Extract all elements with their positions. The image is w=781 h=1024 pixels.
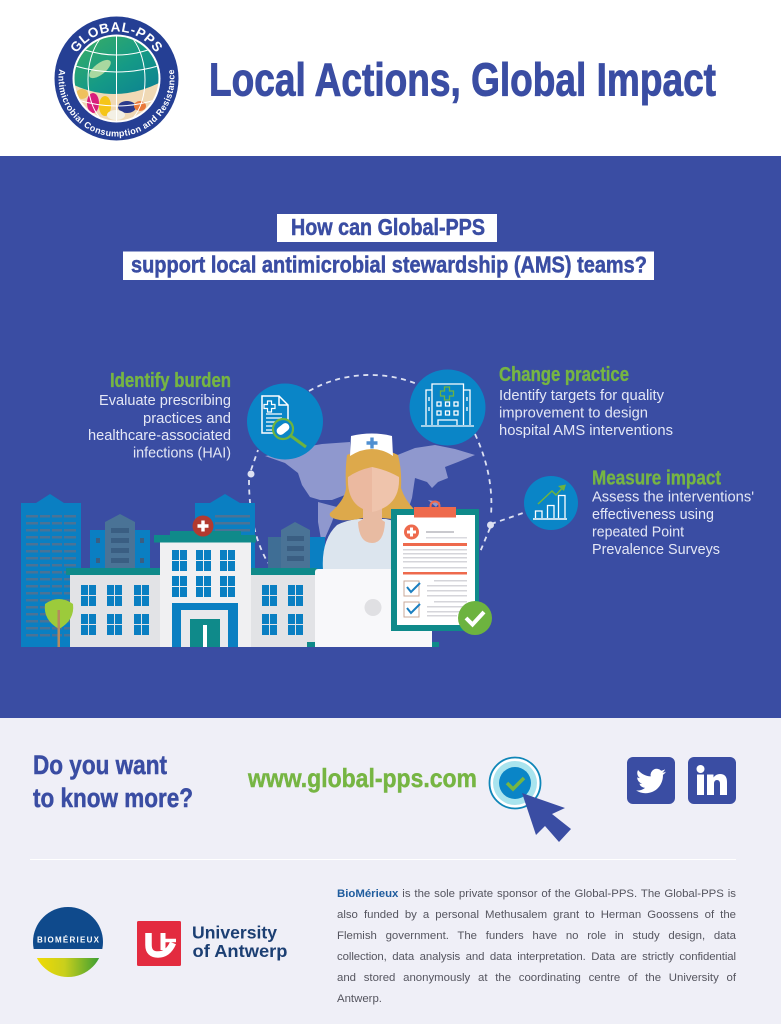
icon: rising bar chart <box>524 476 578 530</box>
sponsorship statement: Flemish government. The funders have no role in study design, data <box>337 930 736 942</box>
dashed connector arc <box>249 375 526 563</box>
divider <box>30 859 736 860</box>
nurse hair <box>330 448 420 520</box>
hospital windows <box>81 550 303 635</box>
icon: click target and cursor <box>490 758 571 842</box>
text block: change practice <box>499 364 673 439</box>
text block: change practice: Change practice <box>499 364 629 386</box>
sponsorship statement <box>337 888 736 1005</box>
sponsorship statement: also funded by a personal Methusalem grant to Herman Goossens of the <box>337 909 736 921</box>
text block: change practice: improvement to design <box>499 406 648 422</box>
connector dot right <box>487 522 494 528</box>
logo: University of Antwerp: University <box>192 922 277 942</box>
logo: Global-PPS <box>54 16 178 140</box>
text block: measure impact: repeated Point <box>592 524 684 540</box>
text block: identify burden: healthcare-associated <box>88 428 231 444</box>
header band <box>0 0 781 156</box>
text block: measure impact: effectiveness using <box>592 507 714 523</box>
hospital door <box>172 603 238 647</box>
nurse body <box>323 519 412 570</box>
icon: hospital outline <box>410 370 486 446</box>
text block: identify burden: practices and <box>143 411 231 427</box>
text block: identify burden: infections (HAI) <box>133 446 231 462</box>
background city <box>21 494 325 647</box>
website link: www.global-pps.com <box>247 763 477 793</box>
heading: do you want to know more: to know more? <box>33 783 193 813</box>
text block: identify burden: Evaluate prescribing <box>99 393 231 409</box>
logo: bioMérieux <box>33 907 103 977</box>
sponsorship statement: collection, data analysis and data interpretation. Data are strictly confidential <box>337 951 736 963</box>
laptop <box>307 569 439 647</box>
nurse cap <box>350 434 393 456</box>
icon: twitter <box>627 757 675 804</box>
sponsorship statement: BioMérieux is the sole private sponsor of the Global-PPS. The Global-PPS is <box>337 888 736 900</box>
text block: measure impact: Measure impact <box>592 468 721 490</box>
logo: University of Antwerp: of Antwerp <box>192 941 288 961</box>
nurse <box>323 434 420 570</box>
text block: measure impact: Prevalence Surveys <box>592 542 720 558</box>
heading: do you want to know more: Do you want <box>33 750 167 780</box>
footer band <box>0 718 781 1024</box>
logo: University of Antwerp <box>137 921 288 966</box>
logo: bioMérieux: BIOMÉRIEUX <box>37 936 100 944</box>
nurse neck <box>358 505 385 543</box>
sponsorship statement: Antwerp. <box>337 993 382 1005</box>
text block: measure impact: Assess the interventions' <box>592 490 754 506</box>
text block: identify burden <box>88 370 231 462</box>
logo: Global-PPS: GLOBAL-PPS <box>71 22 162 52</box>
logo: Global-PPS: Antimicrobial Consumption and Resistance <box>58 69 174 138</box>
icon: green check badge <box>458 601 492 635</box>
nurse face <box>348 467 399 512</box>
hospital red cross sign <box>192 516 214 536</box>
sponsorship statement: and stored anonymously at the coordinating centre of the University of <box>337 972 736 984</box>
connector dot left <box>248 470 254 478</box>
heading: question line 2: support local antimicrobial stewardship (AMS) teams? <box>131 252 647 278</box>
world map <box>265 442 475 545</box>
text block: measure impact <box>592 468 754 558</box>
text block: identify burden: Identify burden <box>110 370 231 392</box>
text block: change practice: hospital AMS interventions <box>499 423 673 439</box>
icon: linkedin <box>688 757 736 804</box>
clipboard <box>391 502 492 635</box>
hospital building <box>66 516 317 647</box>
tree <box>45 599 73 647</box>
heading: question line 1: How can Global-PPS <box>291 214 485 240</box>
icon: document and magnifier <box>247 384 323 460</box>
text block: change practice: Identify targets for quality <box>499 388 665 404</box>
main blue panel <box>0 156 781 718</box>
heading: do you want to know more <box>33 750 193 813</box>
